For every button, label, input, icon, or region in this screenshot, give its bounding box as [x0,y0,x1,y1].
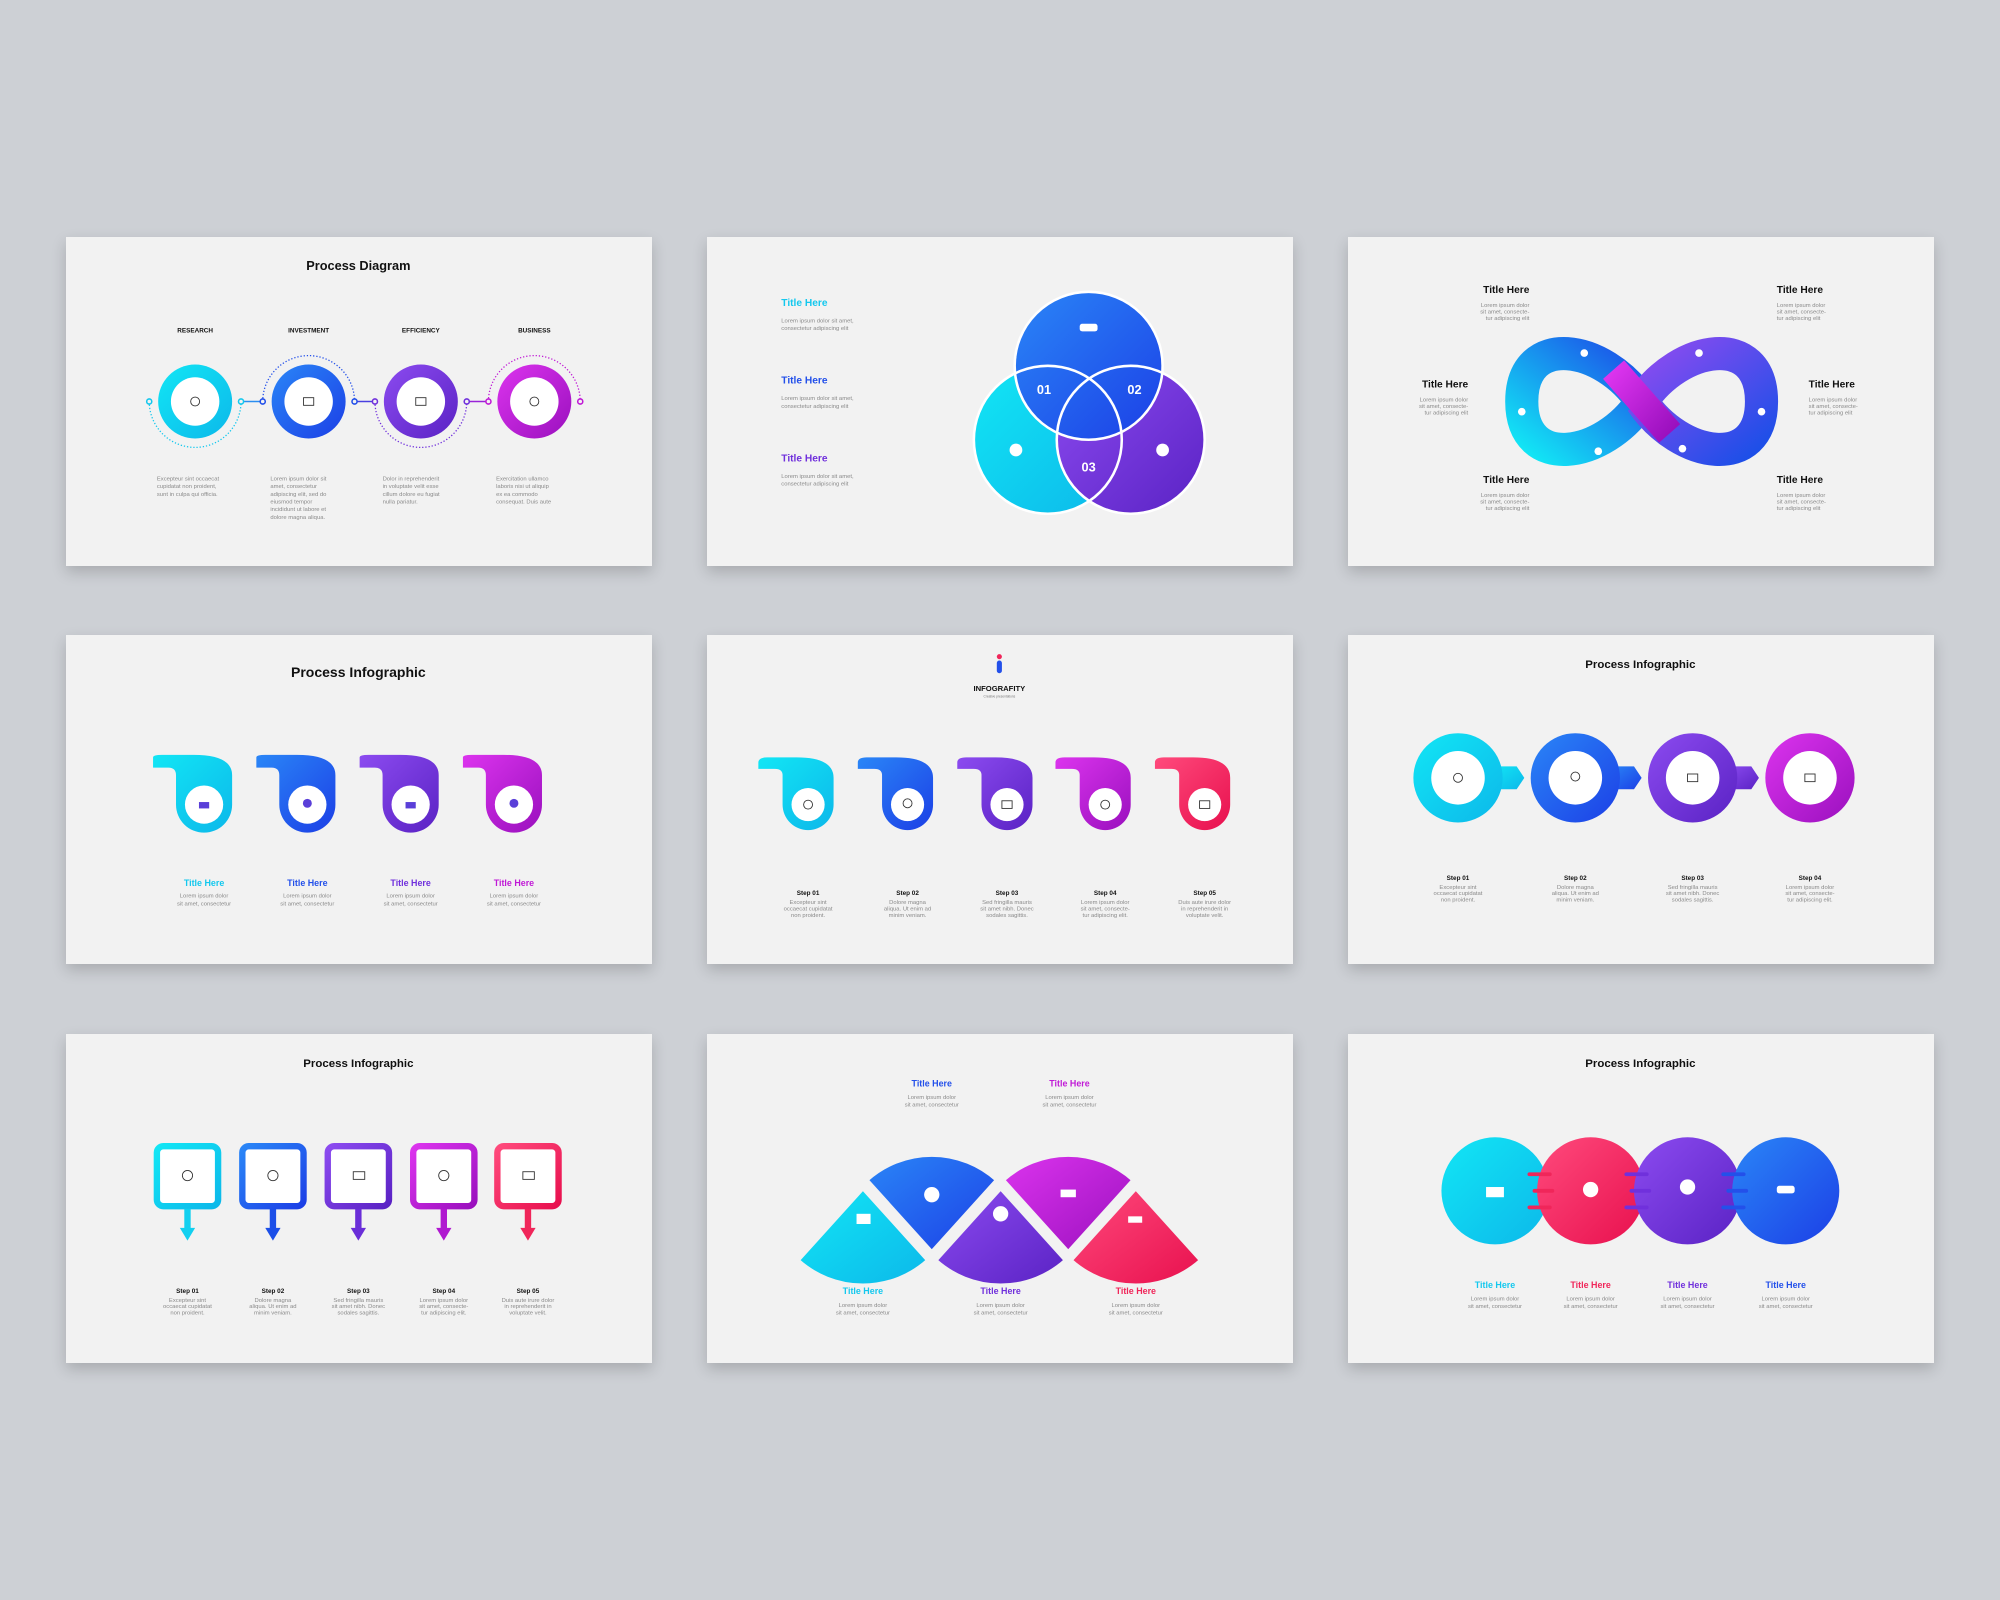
text blocks: sit amet, consecte- [1480,310,1529,316]
circles [1441,1137,1839,1244]
text blocks: Title Here [1116,1286,1156,1296]
step labels [177,328,551,335]
descriptions: adipiscing elit, sed do [270,492,327,498]
text blocks: sit amet, consecte- [1777,500,1826,506]
step texts: minim veniam. [254,1311,292,1317]
text blocks: tur adipiscing elit [1486,316,1530,322]
text blocks: Lorem ipsum dolor [976,1303,1025,1309]
text blocks: Lorem ipsum dolor [1663,1297,1712,1303]
sectors [798,1155,1201,1285]
circles [1413,733,1855,822]
panel: infinity [1348,237,1934,566]
text blocks: tur adipiscing elit [1777,316,1821,322]
flag steps [153,755,542,833]
panel: wave sectors [707,1034,1293,1363]
step texts: Lorem ipsum dolor [490,894,538,900]
step labels: INVESTMENT [288,328,329,335]
step texts: Step 01 [1447,875,1470,882]
step texts: minim veniam. [1556,898,1595,904]
step texts: sodales sagittis. [986,913,1028,919]
step texts: Step 02 [1564,875,1587,882]
title: Process Diagram [306,258,410,273]
step texts: Step 04 [1799,875,1822,882]
step texts: occaecat cupidatat [163,1304,212,1310]
step texts: tur adipiscing elit. [1083,913,1128,919]
text blocks: Title Here [1570,1280,1611,1290]
text blocks: Lorem ipsum dolor [1045,1095,1094,1101]
text blocks: sit amet, consecte- [1777,310,1826,316]
text blocks: Title Here [1475,1280,1515,1290]
step texts: in reprehenderit in [504,1304,552,1310]
step texts: occaecat cupidatat [1434,891,1483,897]
text blocks: consectetur adipiscing elit [781,326,849,332]
text blocks [781,298,854,488]
text blocks: sit amet, consectetur [1042,1103,1097,1109]
title: Process Infographic [1585,1058,1696,1070]
descriptions: cupidatat non proident, [157,484,217,490]
step texts: tur adipiscing elit. [421,1311,467,1317]
descriptions [157,477,551,521]
logo [973,654,1025,698]
panel: circle chain [1348,635,1934,964]
text blocks: sit amet, consectetur [1661,1304,1715,1310]
text blocks: Title Here [781,376,828,387]
text blocks: Title Here [843,1286,883,1296]
logo: Creative presentations [983,694,1016,698]
text blocks: tur adipiscing elit [1809,410,1853,416]
step texts: sit amet nibh. Donec [980,906,1034,912]
text blocks: Title Here [1777,475,1823,486]
step texts: tur adipiscing elit. [1787,898,1833,904]
text blocks: Lorem ipsum dolor [1761,1297,1810,1303]
text blocks: Lorem ipsum dolor [1809,397,1857,403]
step texts: aliqua. Ut enim ad [249,1304,297,1310]
step texts: Step 04 [432,1288,456,1295]
text blocks: sit amet, consectetur [905,1103,959,1109]
step texts: Step 02 [262,1288,285,1295]
step texts: Title Here [287,878,328,888]
descriptions: nulla pariatur. [383,500,418,506]
step texts: Step 05 [1193,890,1216,897]
step texts: Step 05 [517,1288,540,1295]
logo: INFOGRAFITY [973,684,1025,693]
step labels: RESEARCH [177,328,213,335]
step texts: Sed fringilla mauris [1668,885,1718,891]
step texts: Title Here [390,878,431,888]
step texts: Step 04 [1094,890,1117,897]
text blocks: tur adipiscing elit [1425,410,1469,416]
text blocks: Title Here [912,1078,952,1088]
descriptions: consequat. Duis aute [496,500,551,506]
text blocks: sit amet, consectetur [1564,1304,1618,1310]
venn circles: 02 [1127,382,1142,397]
step labels: EFFICIENCY [402,328,441,335]
step texts: Step 02 [896,890,919,897]
step labels: BUSINESS [518,328,551,335]
text blocks: Lorem ipsum dolor [908,1095,956,1101]
panel: process diagram [66,237,652,566]
step texts: sit amet, consecte- [1081,906,1130,912]
step texts: voluptate velit. [1186,913,1224,919]
text blocks: sit amet, consectetur [1109,1311,1163,1317]
step texts: Step 01 [797,890,820,897]
panel: venn diagram [707,237,1293,566]
text blocks: Lorem ipsum dolor sit amet, [781,474,854,480]
descriptions: Dolor in reprehenderit [383,477,440,483]
step texts: non proident. [170,1311,205,1317]
panel: square pins [66,1034,652,1363]
circles [158,365,571,438]
step texts: sodales sagittis. [1672,898,1714,904]
title: Process Infographic [291,664,426,680]
step texts: Dolore magna [255,1298,292,1304]
text blocks: tur adipiscing elit [1486,506,1530,512]
step texts: Lorem ipsum dolor [1786,885,1834,891]
text blocks: Lorem ipsum dolor [1777,493,1825,499]
step texts: Step 03 [1681,875,1704,882]
text blocks: Lorem ipsum dolor sit amet, [781,318,854,324]
step texts: voluptate velit. [509,1311,547,1317]
step texts: Excepteur sint [790,900,827,906]
text blocks: Title Here [781,453,828,464]
text blocks: Lorem ipsum dolor [839,1303,887,1309]
step texts: Excepteur sint [1439,885,1477,891]
text blocks: Lorem ipsum dolor [1481,493,1529,499]
descriptions: eiusmod tempor [270,500,312,506]
step texts [784,890,1231,919]
text blocks: sit amet, consecte- [1480,500,1529,506]
descriptions: cillum dolore eu fugiat [383,492,440,498]
descriptions: Excepteur sint occaecat [157,477,219,483]
descriptions: Lorem ipsum dolor sit [270,477,327,483]
descriptions: sunt in culpa qui officia. [157,492,218,498]
step texts: Step 03 [347,1288,370,1295]
step texts: non proident. [1441,898,1475,904]
text blocks: Title Here [1777,285,1823,296]
text blocks: Title Here [781,298,828,309]
step texts: Excepteur sint [169,1298,206,1304]
text blocks: consectetur adipiscing elit [781,404,849,410]
step texts: Duis aute irure dolor [1178,900,1231,906]
text blocks: Title Here [1483,285,1530,296]
step texts: sit amet, consectetur [177,901,231,907]
infinity loop [1518,349,1765,455]
step texts [177,878,541,907]
text blocks: Lorem ipsum dolor [1777,303,1825,309]
text blocks: Title Here [1667,1280,1708,1290]
step texts [1434,875,1835,904]
venn circles [974,292,1205,514]
panel: overlapping circles [1348,1034,1934,1363]
text blocks: sit amet, consectetur [836,1311,890,1317]
pins [157,1146,559,1241]
text blocks [1468,1280,1813,1310]
step texts: Lorem ipsum dolor [1081,900,1130,906]
step texts: sit amet, consectetur [280,901,334,907]
step texts: occaecat cupidatat [784,906,833,912]
text blocks: sit amet, consectetur [1759,1304,1813,1310]
text blocks: Title Here [1422,379,1469,390]
step texts: non proident. [791,913,826,919]
text blocks [836,1078,1163,1317]
step texts: Duis aute irure dolor [502,1298,554,1304]
text blocks: sit amet, consectetur [974,1311,1028,1317]
descriptions: ex ea commodo [496,492,539,498]
step texts: Title Here [494,878,534,888]
text blocks: Lorem ipsum dolor [1481,303,1529,309]
panel: flags 4 [66,635,652,964]
flag steps [758,757,1230,830]
text blocks: consectetur adipiscing elit [781,482,849,488]
title: Process Infographic [303,1058,414,1070]
descriptions: in voluptate velit esse [383,484,439,490]
text blocks: Title Here [1049,1078,1090,1088]
text blocks: sit amet, consecte- [1809,404,1858,410]
panel: flags 5 [707,635,1293,964]
step texts: Dolore magna [889,900,927,906]
step texts: in reprehenderit in [1181,906,1228,912]
step texts: aliqua. Ut enim ad [884,906,931,912]
venn circles: 03 [1082,460,1096,475]
text blocks: Lorem ipsum dolor [1420,397,1468,403]
venn circles: 01 [1037,382,1051,397]
step texts: minim veniam. [889,913,927,919]
text blocks: Lorem ipsum dolor [1471,1297,1519,1303]
step texts: sit amet nibh. Donec [1666,891,1719,897]
text blocks: Title Here [980,1286,1021,1296]
text blocks: Title Here [1766,1280,1806,1290]
step texts: Lorem ipsum dolor [180,894,228,900]
step texts: sit amet nibh. Donec [332,1304,385,1310]
text blocks: sit amet, consecte- [1419,404,1468,410]
dotted connectors [149,356,580,447]
step texts [163,1288,554,1317]
descriptions: Exercitation ullamco [496,477,549,483]
title: Process Infographic [1585,659,1696,671]
descriptions: laboris nisi ut aliquip [496,484,550,490]
step texts: sit amet, consectetur [487,901,541,907]
step texts: Dolore magna [1557,885,1594,891]
text blocks [1419,285,1858,512]
step texts: Lorem ipsum dolor [283,894,332,900]
descriptions: dolore magna aliqua. [270,515,325,521]
step texts: Lorem ipsum dolor [386,894,435,900]
text blocks: sit amet, consectetur [1468,1304,1522,1310]
text blocks: Title Here [1809,379,1855,390]
step texts: sit amet, consectetur [384,901,438,907]
step texts: sodales sagittis. [338,1311,380,1317]
descriptions: incididunt ut labore et [270,507,326,513]
step texts: sit amet, consecte- [419,1304,468,1310]
arrows [1491,766,1759,789]
step texts: aliqua. Ut enim ad [1552,891,1599,897]
step texts: Step 01 [176,1288,199,1295]
text blocks: Lorem ipsum dolor [1566,1297,1615,1303]
descriptions: amet, consectetur [270,484,317,490]
step texts: Lorem ipsum dolor [420,1298,468,1304]
step texts: Step 03 [996,890,1019,897]
step texts: Sed fringilla mauris [333,1298,383,1304]
step texts: Title Here [184,878,224,888]
step texts: Sed fringilla mauris [982,900,1032,906]
step texts: sit amet, consecte- [1785,891,1835,897]
text blocks: Lorem ipsum dolor [1112,1303,1160,1309]
text blocks: Title Here [1483,475,1530,486]
text blocks: tur adipiscing elit [1777,506,1821,512]
text blocks: Lorem ipsum dolor sit amet, [781,396,854,402]
